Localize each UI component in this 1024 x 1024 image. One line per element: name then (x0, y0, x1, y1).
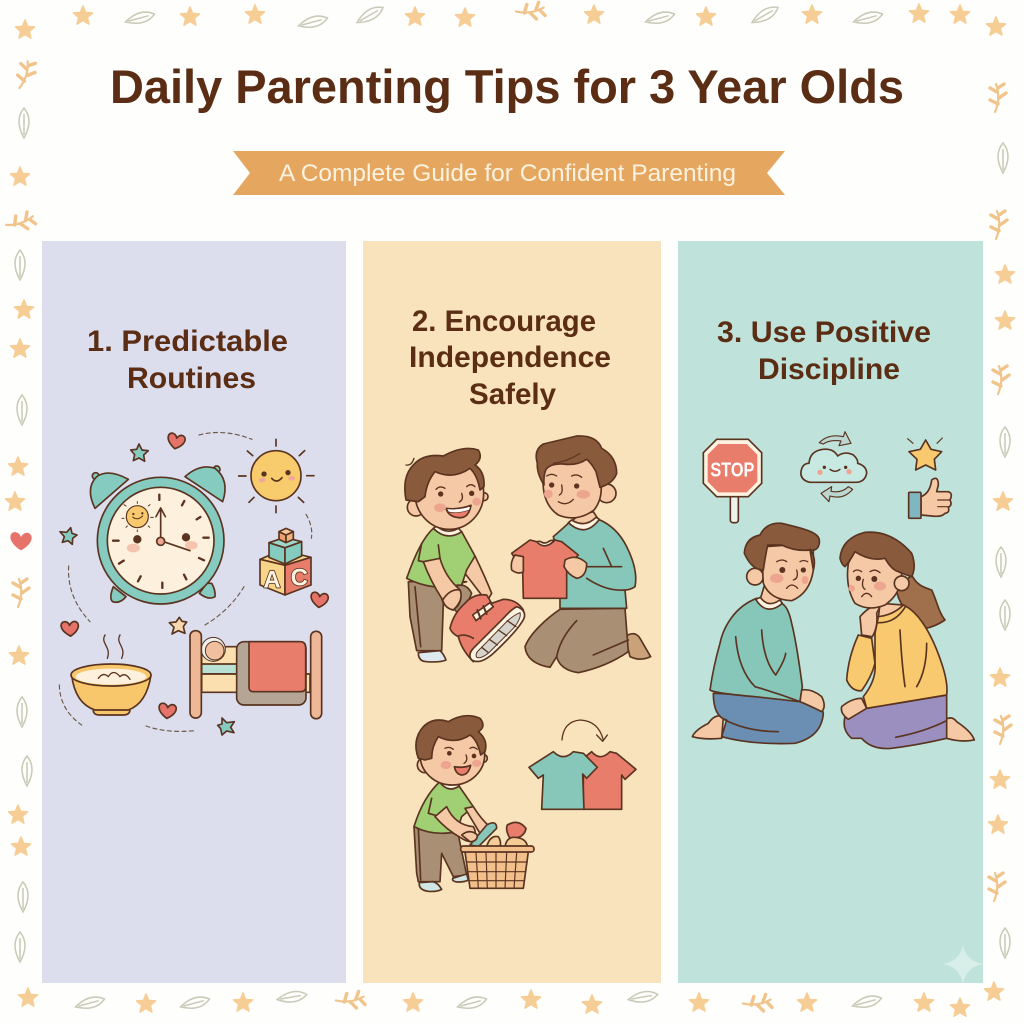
laundry basket (470, 823, 497, 847)
panel: positive discipline (678, 241, 983, 983)
icon: child sleeping in bed (190, 631, 322, 719)
panel: predictable routines (42, 241, 346, 983)
boy putting on shoe (405, 448, 525, 662)
subtitle ribbon: A Complete Guide for Confident Parenting (279, 160, 736, 187)
head (407, 499, 425, 516)
shirt swap with arrow (529, 720, 636, 809)
title: Daily Parenting Tips for 3 Year Olds (110, 60, 904, 113)
icon: stop sign (703, 439, 762, 523)
girl sitting, thinking (840, 532, 974, 749)
icon: alphabet blocks (260, 528, 311, 595)
heading: 1. Predictable Routines: 1. Predictable (87, 325, 288, 358)
icon: small hearts and stars (60, 433, 329, 735)
dashed connecting arcs (59, 432, 312, 731)
heading: 2. Encourage Independence Safely: 2. Encourage (412, 305, 596, 338)
heading: 3. Use Positive Discipline (717, 316, 931, 386)
boy sorting laundry (414, 716, 534, 891)
routine illustrations (59, 432, 329, 735)
heading: 2. Encourage Independence Safely: Independence (409, 341, 611, 374)
icon: calm cloud with arrows (801, 432, 867, 502)
independence illustrations (405, 436, 651, 891)
boy sitting (692, 523, 824, 744)
icon: stop sign: STOP (710, 458, 755, 481)
heading: 2. Encourage Independence Safely (409, 305, 611, 411)
heading: 3. Use Positive Discipline: Discipline (758, 353, 900, 386)
discipline illustrations (692, 432, 974, 749)
heading: 1. Predictable Routines (87, 325, 288, 395)
icon: star reward (908, 438, 942, 470)
icon: alphabet blocks: C (291, 564, 308, 591)
icon: thumbs up (909, 478, 951, 518)
dad holding red shirt (511, 436, 651, 673)
sparkle watermark (943, 945, 983, 984)
icon: alphabet blocks: A (263, 566, 281, 593)
heading: 3. Use Positive Discipline: 3. Use Positive (717, 316, 931, 349)
icon: alarm clock (90, 466, 225, 604)
icon: smiling sun (239, 439, 314, 513)
icon: porridge bowl with steam (71, 635, 151, 715)
red sneaker (450, 595, 523, 662)
heading: 2. Encourage Independence Safely: Safely (469, 378, 556, 411)
heading: 1. Predictable Routines: Routines (127, 362, 256, 395)
subtitle ribbon (233, 151, 785, 195)
panel: encourage independence (363, 241, 661, 983)
